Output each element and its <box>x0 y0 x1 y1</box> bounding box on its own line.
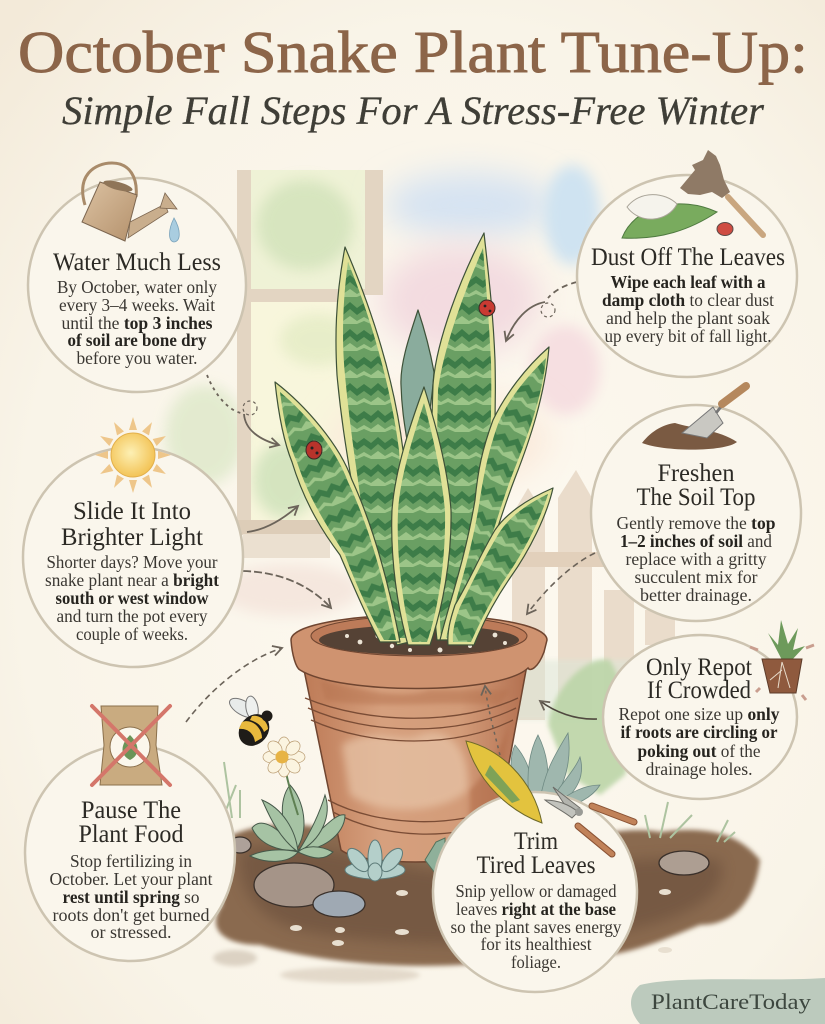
body text: Stop fertilizing in <box>70 851 192 871</box>
body text: every 3–4 weeks. Wait <box>59 295 215 315</box>
icon: sun <box>95 417 171 493</box>
heading: Freshen <box>658 458 735 487</box>
icon: watering can <box>82 163 179 242</box>
body text: leaves right at the base <box>456 899 616 919</box>
small succulent near trim circle <box>425 838 445 875</box>
arrow: dust to leaf <box>506 282 577 341</box>
body text: of soil are bone dry <box>68 330 207 350</box>
body text: up every bit of fall light. <box>604 326 772 346</box>
arrow: repot to pot <box>540 701 597 719</box>
body text: 1–2 inches of soil and <box>620 531 772 551</box>
body text: Snip yellow or damaged <box>456 881 617 901</box>
window frame <box>237 170 383 558</box>
body text: drainage holes. <box>646 759 752 779</box>
grass tufts <box>224 762 735 842</box>
body text: By October, water only <box>57 277 217 297</box>
body text: better drainage. <box>640 585 752 605</box>
body text: couple of weeks. <box>76 624 188 644</box>
panel: trim tired leaves <box>433 741 637 992</box>
icon: repotted plant with roots <box>750 620 814 700</box>
pebbles <box>290 889 672 953</box>
snake plant <box>275 233 553 645</box>
body text: poking out of the <box>638 741 761 761</box>
body text: Shorter days? Move your <box>46 552 218 572</box>
body text: Gently remove the top <box>616 513 776 533</box>
heading: Brighter Light <box>61 522 203 551</box>
heading: Only Repot <box>646 652 752 681</box>
heading: Slide It Into <box>73 496 191 525</box>
bee <box>227 694 276 752</box>
body text: and turn the pot every <box>56 606 208 626</box>
body text <box>616 513 776 605</box>
panel: only repot if crowded <box>603 620 814 799</box>
title: October Snake Plant Tune-Up: <box>18 19 808 85</box>
garden soil <box>213 824 760 983</box>
heading: Pause The <box>81 795 181 824</box>
far left leaf <box>275 382 400 642</box>
body text: so the plant saves energy <box>450 917 622 937</box>
body text: until the top 3 inches <box>62 313 213 333</box>
body text: if roots are circling or <box>620 722 778 742</box>
fence <box>500 470 675 720</box>
arrow: light to leaf <box>247 506 298 532</box>
right arching leaf <box>440 347 549 640</box>
background bush <box>548 660 640 795</box>
back leaf <box>401 310 434 462</box>
pot soil and perlite <box>319 625 519 655</box>
tall right leaf <box>430 233 495 640</box>
body text: October. Let your plant <box>50 869 213 889</box>
heading: If Crowded <box>647 675 751 704</box>
heading: Tired Leaves <box>476 850 596 879</box>
terracotta pot <box>291 615 547 862</box>
body text: Wipe each leaf with a <box>610 272 766 292</box>
body text: snake plant near a bright <box>45 570 219 590</box>
daisy <box>263 737 305 815</box>
body text <box>618 704 780 779</box>
rocks <box>229 837 709 917</box>
pot bands <box>305 698 518 834</box>
icon: yellow leaf <box>466 741 542 823</box>
brand label <box>631 978 825 1024</box>
body text: replace with a gritty <box>626 549 767 569</box>
panel: water much less <box>28 163 246 392</box>
watercolor window and garden backdrop <box>165 165 675 795</box>
icon: crossed out fertilizer bag <box>92 706 170 785</box>
heading: Plant Food <box>78 819 184 848</box>
brand label: PlantCareToday <box>651 989 811 1014</box>
tall left leaf <box>336 247 418 645</box>
succulent beside pot <box>250 785 345 861</box>
icon: water drop <box>170 218 179 242</box>
icon: pruning shears <box>545 787 634 854</box>
body text: before you water. <box>76 348 198 368</box>
heading: Trim <box>514 826 558 855</box>
body text: and help the plant soak <box>606 308 770 328</box>
fence wash <box>505 660 640 720</box>
front center leaf <box>392 387 451 645</box>
heading <box>476 826 596 879</box>
body text: succulent mix for <box>634 567 758 587</box>
body text: foliage. <box>511 952 561 972</box>
subtitle: Simple Fall Steps For A Stress-Free Winter <box>62 88 764 133</box>
ladybug on upper leaf <box>479 300 495 316</box>
arrow: trim to pot <box>485 686 500 755</box>
panel: dust off the leaves <box>577 150 797 377</box>
body text <box>50 851 213 942</box>
heading: The Soil Top <box>636 482 756 511</box>
icon: cloth and leaf <box>622 195 717 238</box>
body text: damp cloth to clear dust <box>602 290 774 310</box>
body text: or stressed. <box>90 922 172 942</box>
icon: feather duster <box>680 150 763 235</box>
ladybug on left leaf <box>306 441 322 459</box>
low right leaf <box>448 488 553 645</box>
arrow: light to pot <box>243 571 331 608</box>
icon: small ladybug <box>717 222 733 236</box>
heading <box>78 795 184 848</box>
heading <box>646 652 752 704</box>
pot rim <box>291 615 547 689</box>
body text: for its healthiest <box>480 934 592 954</box>
body text <box>57 277 217 368</box>
body text: rest until spring so <box>62 887 200 907</box>
body text: south or west window <box>56 588 209 608</box>
arrow: soil to pot <box>527 553 595 614</box>
blue succulent rosette <box>344 840 406 881</box>
arrow: fertilizer to pot <box>186 648 282 722</box>
arrow: water to plant <box>207 375 279 445</box>
body text <box>45 552 219 644</box>
body text <box>602 272 774 346</box>
panel: freshen the soil top <box>591 386 801 621</box>
body text: Repot one size up only <box>618 704 780 724</box>
body text <box>450 881 622 972</box>
panel: pause the plant food <box>25 706 235 961</box>
title <box>18 19 808 133</box>
heading: Water Much Less <box>53 247 221 276</box>
heading <box>61 496 203 551</box>
heading <box>636 458 756 511</box>
panel: brighter light <box>23 417 243 667</box>
heading: Dust Off The Leaves <box>591 242 785 271</box>
body text: roots don't get burned <box>52 905 210 925</box>
back spiky succulent <box>511 733 600 808</box>
icon: trowel and soil <box>642 386 746 450</box>
